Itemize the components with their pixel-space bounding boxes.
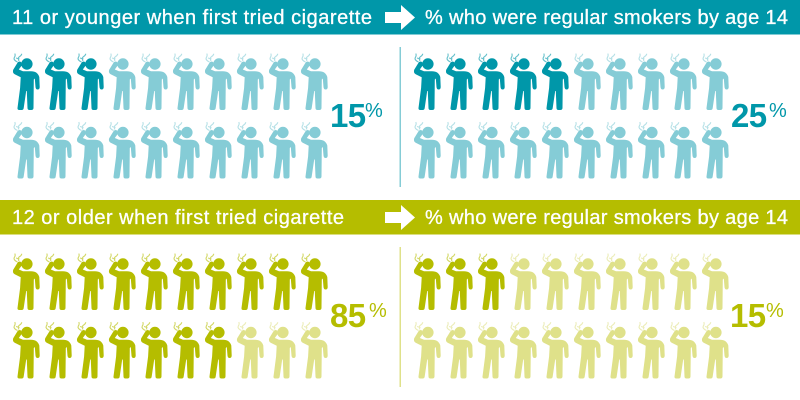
stat: 15%: 15 (330, 97, 366, 134)
stat: 25%: % (769, 100, 787, 122)
stat: 15%: % (365, 100, 383, 122)
stat: 15%: 15 (730, 297, 766, 334)
header bar: 12 or older: 12 or older when first tried cigarette (12, 207, 344, 229)
header bar: 11 or younger: 11 or younger when first tried cigarette (12, 7, 372, 29)
stat: 85%: 85 (330, 297, 366, 334)
stat: 25%: 25 (731, 97, 767, 134)
arrow: teal header (385, 5, 415, 30)
stat: 15%: % (766, 300, 784, 322)
pictogram: 15% regular smokers (414, 254, 729, 378)
header bar: 12 or older: % who were regular smokers by age 14 (425, 207, 788, 229)
header bar: 11 or younger: % who were regular smokers by age 14 (425, 7, 788, 29)
stat: 85%: % (369, 300, 387, 322)
pictogram: 85% of 12 or older (13, 254, 328, 378)
pictogram: 25% regular smokers (414, 54, 729, 178)
header bar: 11 or younger (0, 0, 800, 34)
pictogram: 15% of 11 or younger (13, 54, 328, 178)
header bar: 12 or older (0, 200, 800, 234)
arrow: olive header (385, 205, 415, 230)
